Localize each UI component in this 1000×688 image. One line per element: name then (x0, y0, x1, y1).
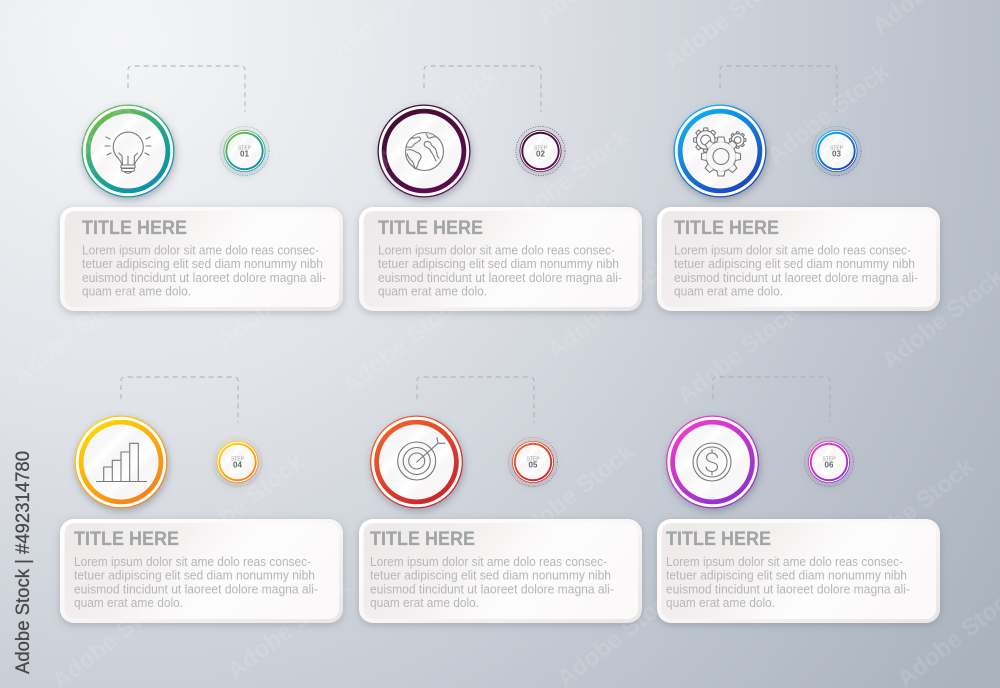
icon: bar chart (74, 416, 168, 508)
step badge 06: STEP (822, 456, 836, 462)
watermark overlay: Adobe Stock (507, 438, 640, 550)
step badge 03 (812, 126, 861, 176)
watermark overlay: Adobe Stock (542, 253, 675, 365)
watermark overlay: Adobe Stock (672, 298, 805, 410)
step badge 05: 05 (529, 460, 538, 470)
card 6: TITLE HERE (666, 528, 771, 550)
watermark overlay: Adobe Stock (847, 453, 980, 565)
watermark overlay: Adobe Stock (212, 243, 345, 355)
card 5 (359, 519, 642, 623)
step badge 04: STEP (231, 456, 245, 462)
card 5: euismod tincidunt ut laoreet dolore magna ali- (370, 582, 614, 596)
card 6: quam erat ame dolo. (666, 596, 775, 610)
card 6: euismod tincidunt ut laoreet dolore magna ali- (666, 582, 910, 596)
card 4: euismod tincidunt ut laoreet dolore magna ali- (74, 582, 318, 596)
watermark overlay: Adobe Stock (337, 288, 470, 400)
card 6: tetuer adipiscing elit sed diam nonummy nibh (666, 568, 907, 582)
card 3: euismod tincidunt ut laoreet dolore magna ali- (674, 271, 918, 285)
card 2 (359, 207, 642, 311)
icon: target (370, 416, 463, 508)
card 2: Lorem ipsum dolor sit ame dolo reas consec- (378, 244, 615, 258)
card 6 (657, 519, 940, 623)
icon: gears (674, 104, 766, 198)
card 2: tetuer adipiscing elit sed diam nonummy nibh (378, 257, 619, 271)
card 2: euismod tincidunt ut laoreet dolore magna ali- (378, 271, 622, 285)
card 3: Lorem ipsum dolor sit ame dolo reas consec- (674, 244, 911, 258)
card 5: TITLE HERE (370, 528, 475, 550)
card 3: tetuer adipiscing elit sed diam nonummy nibh (674, 257, 915, 271)
watermark overlay: Adobe Stock (222, 573, 355, 685)
card 3 (657, 207, 940, 311)
step badge 05: STEP (526, 456, 540, 462)
watermark overlay: Adobe Stock (372, 63, 505, 175)
step badge 04: 04 (233, 460, 242, 470)
panel: step 4 (60, 416, 343, 623)
card 3: TITLE HERE (674, 217, 779, 239)
card 3: quam erat ame dolo. (674, 284, 783, 298)
step badge 01 (220, 126, 269, 176)
card 4: quam erat ame dolo. (74, 596, 183, 610)
panel: step 6 (657, 416, 940, 623)
step badge 03: 03 (832, 150, 841, 158)
step badge 03: STEP (830, 146, 844, 152)
watermark overlay: Adobe Stock (762, 58, 895, 170)
panel: step 1 (60, 104, 343, 311)
watermark overlay: Adobe Stock (7, 278, 140, 390)
card 2: TITLE HERE (378, 217, 483, 239)
panel: step 2 (359, 104, 642, 311)
watermark overlay: Adobe Stock (177, 448, 310, 560)
step badge 05 (508, 438, 558, 486)
card 1: euismod tincidunt ut laoreet dolore magna ali- (82, 271, 326, 285)
stock id label: Adobe Stock | #492314780 (13, 451, 34, 674)
icon: dollar coin (666, 416, 759, 508)
step badge 04 (213, 438, 262, 486)
step badge 02 (516, 126, 565, 176)
card 5: quam erat ame dolo. (370, 596, 479, 610)
step badge 01: STEP (238, 146, 252, 152)
step badge 02: 02 (536, 150, 545, 158)
panel: step 3 (657, 104, 940, 311)
connector lines (121, 66, 837, 423)
step badge 06 (804, 438, 854, 486)
card 1 (60, 207, 343, 311)
card 1: tetuer adipiscing elit sed diam nonummy nibh (82, 257, 323, 271)
step badge 06: 06 (825, 460, 834, 470)
card 4: Lorem ipsum dolor sit ame dolo reas consec- (74, 555, 311, 569)
watermark overlay: Adobe Stock (42, 73, 175, 185)
card 5: Lorem ipsum dolor sit ame dolo reas consec- (370, 555, 607, 569)
step badge 01: 01 (240, 150, 249, 158)
card 2: quam erat ame dolo. (378, 284, 487, 298)
card 1: TITLE HERE (82, 217, 187, 239)
card 6: Lorem ipsum dolor sit ame dolo reas consec- (666, 555, 903, 569)
icon: light bulb (82, 104, 174, 198)
icon: globe (378, 104, 470, 198)
panel: step 5 (359, 416, 642, 623)
step badge 02: STEP (534, 146, 548, 152)
card 4: tetuer adipiscing elit sed diam nonummy nibh (74, 568, 315, 582)
card 5: tetuer adipiscing elit sed diam nonummy nibh (370, 568, 611, 582)
card 1: Lorem ipsum dolor sit ame dolo reas consec- (82, 244, 319, 258)
watermark overlay: Adobe Stock (502, 123, 635, 235)
card 4 (60, 519, 343, 623)
card 4: TITLE HERE (74, 528, 179, 550)
card 1: quam erat ame dolo. (82, 284, 191, 298)
